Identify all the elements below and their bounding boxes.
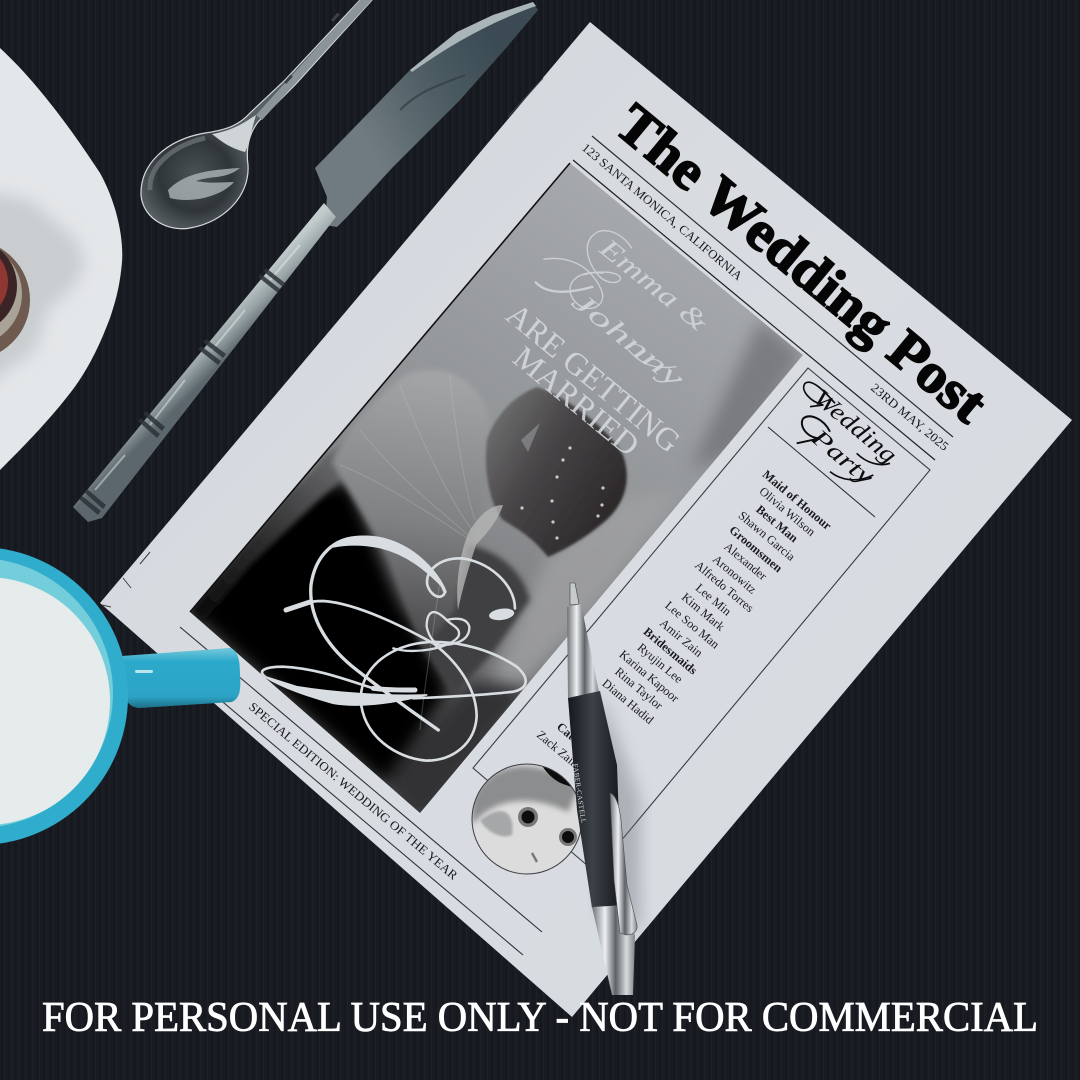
party list: Diana Hadid — [600, 676, 656, 727]
party list: Ryujin Lee — [635, 640, 686, 686]
party list: Rina Taylor — [612, 664, 666, 712]
white monogram — [262, 537, 526, 761]
wedding party panel — [472, 368, 930, 874]
pale veil wedge at cheek — [521, 423, 540, 452]
spoon — [141, 0, 372, 229]
pen — [567, 583, 640, 995]
are getting married: MARRIED — [507, 339, 647, 463]
pen shadow — [600, 690, 640, 930]
cat section label: Cat — [554, 720, 578, 743]
pen black barrel — [568, 691, 622, 908]
address: 123 SANTA MONICA, CALIFORNIA — [579, 141, 745, 283]
knife blade — [315, 2, 538, 227]
translucent dark body — [424, 544, 533, 690]
party list: Kim Mark — [679, 590, 728, 634]
party list: Lee Min — [693, 581, 734, 618]
groom head and bride face — [486, 387, 627, 557]
script flourishes — [535, 231, 677, 367]
party divider — [768, 427, 875, 517]
photo border — [190, 163, 570, 612]
knife — [73, 2, 538, 522]
edition rules — [180, 627, 542, 955]
cup of milk — [0, 547, 240, 845]
special edition line: SPECIAL EDITION: WEDDING OF THE YEAR — [246, 700, 461, 883]
party list: Alexander — [721, 539, 770, 583]
cup handle — [122, 648, 240, 708]
party list — [591, 467, 835, 735]
grey shoulder band along left edge — [190, 440, 350, 620]
photo top rule — [573, 160, 935, 460]
white plate with dessert — [0, 48, 122, 470]
pearls — [520, 446, 605, 540]
party list: Lee Soo Man — [662, 598, 722, 652]
milk surface — [0, 577, 110, 825]
shaded right side of photo — [690, 320, 803, 470]
cat name: Zack Zain — [534, 728, 582, 771]
date: 23RD MAY, 2025 — [868, 381, 951, 454]
party list: Maid of Honour — [760, 467, 835, 533]
crop marks — [102, 78, 543, 607]
party box — [473, 368, 930, 872]
bride veil — [332, 370, 490, 650]
heading flourishes — [797, 382, 890, 480]
masthead title: The Wedding Post — [604, 92, 999, 435]
pen clip — [610, 793, 637, 935]
couple names script: Emma & — [593, 232, 714, 337]
pale veil right of groom — [489, 502, 658, 689]
black figure — [190, 480, 450, 785]
party list: Groomsmen — [727, 523, 785, 575]
pen upper chrome — [567, 604, 599, 698]
pen brand: FABER-CASTELL — [571, 763, 587, 824]
cup body — [0, 547, 128, 845]
party list: Shawn Garcia — [736, 508, 798, 564]
party list: Best Man — [753, 502, 801, 545]
party list: Karina Kapoor — [617, 647, 682, 705]
wedding party heading: Party — [805, 424, 878, 491]
pen nib — [570, 583, 579, 605]
couple names script — [570, 240, 706, 382]
pen lower chrome — [592, 905, 635, 995]
dark lower corner — [385, 680, 530, 820]
wedding party heading — [805, 385, 901, 491]
wedding party heading: Wedding — [808, 385, 901, 469]
masthead rule — [592, 136, 953, 437]
dessert on plate — [0, 239, 30, 360]
wedding photo — [190, 163, 803, 820]
party list: Aronowitz — [710, 552, 760, 597]
couple names script: Johnny — [566, 285, 690, 394]
knife handle — [73, 203, 336, 522]
feather — [457, 505, 503, 610]
are getting married: ARE GETTING — [500, 296, 688, 460]
party list: Olivia Wilson — [757, 484, 818, 539]
cat portrait — [472, 762, 586, 874]
party list: Amir Zain — [657, 616, 706, 660]
party list: Alfredo Torres — [692, 558, 757, 615]
party list: Bridesmaids — [641, 624, 700, 677]
usage notice: FOR PERSONAL USE ONLY - NOT FOR COMMERCIAL — [42, 995, 1038, 1041]
